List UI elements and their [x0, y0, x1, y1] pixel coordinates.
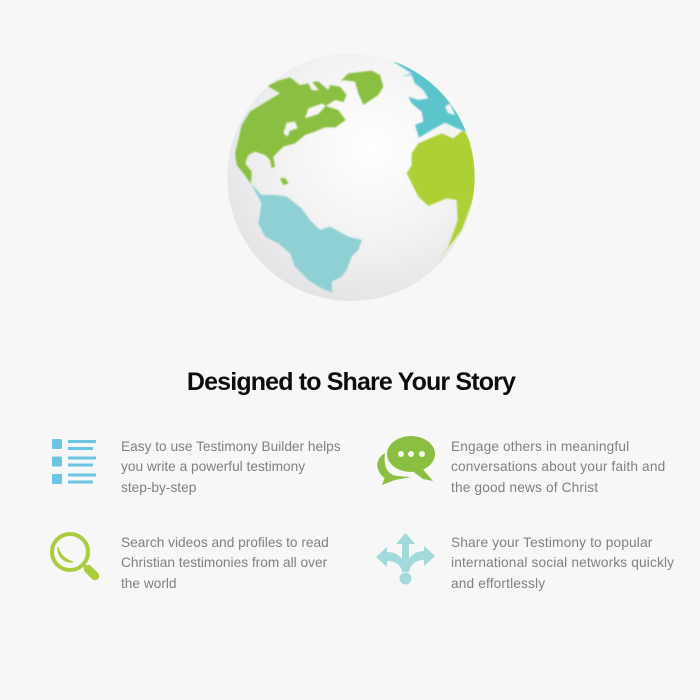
- text: engage others: [451, 438, 665, 495]
- text: engage others: the good news of Christ: [451, 480, 598, 495]
- continents: [235, 62, 478, 293]
- island: Cuba: [280, 178, 289, 185]
- text: testimony builder: Easy to use Testimony Builder helps: [121, 438, 341, 454]
- icon: speech bubbles: [377, 436, 435, 485]
- text: engage others: conversations about your faith and: [451, 459, 665, 474]
- text: share testimony: and effortlessly: [451, 576, 545, 591]
- icon: share arrows: [376, 533, 435, 584]
- text: testimony builder: [121, 438, 341, 495]
- title: Designed to Share Your Story: [187, 368, 515, 396]
- text: engage others: Engage others in meaningful: [451, 438, 629, 454]
- continent: Africa: [407, 130, 478, 263]
- continent: South America: [251, 184, 362, 293]
- text: share testimony: international social networks quickly: [451, 555, 674, 570]
- text: search videos: [121, 534, 329, 591]
- text: search videos: Search videos and profiles to read: [121, 534, 329, 550]
- text: testimony builder: you write a powerful testimony: [121, 459, 305, 474]
- text: testimony builder: step-by-step: [121, 480, 196, 495]
- text: share testimony: [451, 534, 674, 591]
- icon: magnifying glass: [50, 532, 100, 580]
- continent: Europe: [393, 62, 468, 138]
- globe illustration: [228, 62, 475, 301]
- text: share testimony: Share your Testimony to popular: [451, 534, 652, 550]
- text: search videos: Christian testimonies from all over: [121, 555, 327, 570]
- continent: Greenland: [340, 71, 383, 105]
- globe sphere: [227, 54, 475, 301]
- icon: list: [52, 439, 96, 484]
- text: search videos: the world: [121, 576, 177, 591]
- continent: North America: [235, 77, 347, 184]
